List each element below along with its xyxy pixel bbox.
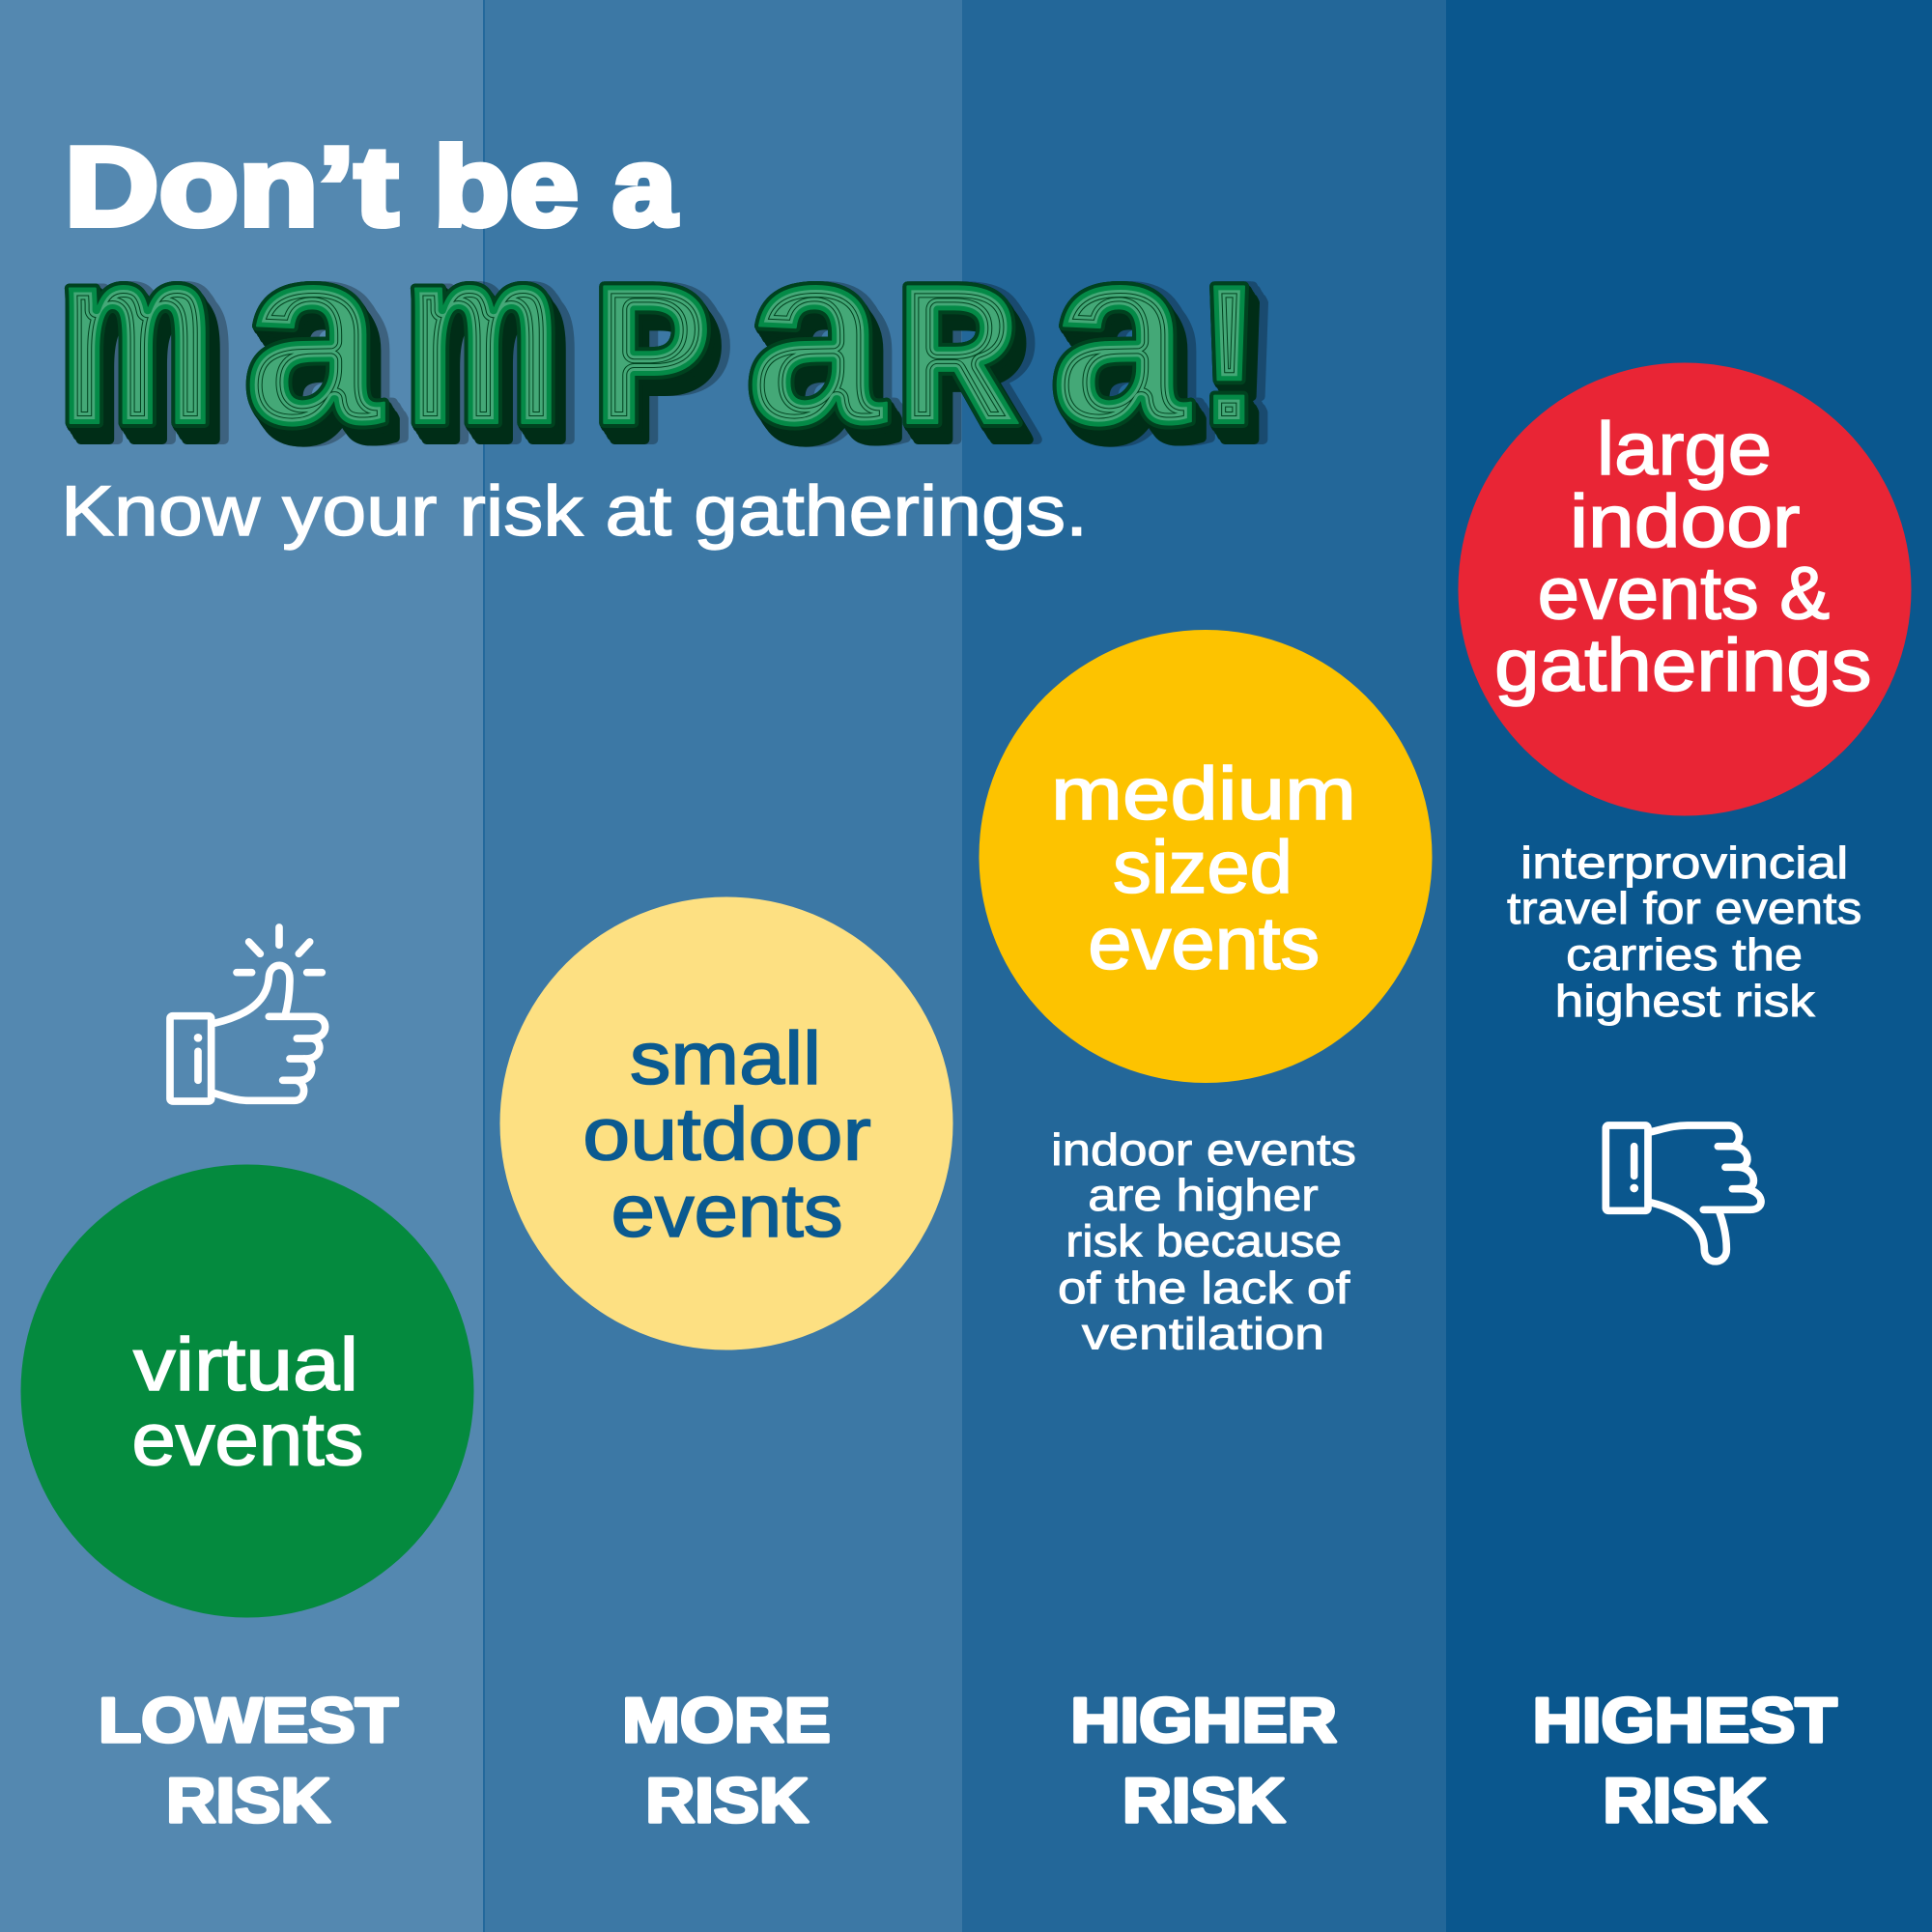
circle: large indoor events and gatherings: gatherings xyxy=(1494,624,1872,707)
text: indoor events note: of the lack of xyxy=(1058,1263,1350,1313)
panel: lowest risk column background xyxy=(0,0,483,1932)
label: lowest risk: LOWEST xyxy=(99,1685,398,1755)
text: indoor events note: indoor events xyxy=(1051,1124,1356,1175)
title: MAMPARA striped lettering: mamPaRa! xyxy=(61,212,1292,500)
title: Don't be a: be xyxy=(434,124,579,249)
text: indoor events note xyxy=(1051,1124,1356,1359)
text: indoor events note: risk because xyxy=(1065,1215,1342,1265)
circle: virtual events: events xyxy=(131,1399,363,1482)
circle: small outdoor events: outdoor xyxy=(582,1094,871,1177)
circle: medium sized events: medium xyxy=(1051,753,1356,836)
label: lowest risk: RISK xyxy=(166,1765,330,1835)
subtitle: Know your risk at gatherings. xyxy=(61,472,1088,551)
circle: medium sized events: events xyxy=(1088,902,1320,985)
text: interprovincial travel note: travel for events xyxy=(1507,883,1861,933)
text: interprovincial travel note xyxy=(1507,838,1861,1026)
label: highest risk xyxy=(1533,1685,1837,1835)
circle: small outdoor events: events xyxy=(611,1170,843,1253)
panel: more risk column background xyxy=(483,0,962,1932)
panel: highest risk column background xyxy=(1446,0,1932,1932)
title: Don't be a: Don’t xyxy=(65,124,398,249)
title: MAMPARA striped lettering: mamPaRa! xyxy=(61,212,1292,500)
circle: large indoor events and gatherings: events & xyxy=(1538,552,1830,635)
label: higher risk xyxy=(1070,1685,1337,1835)
text: indoor events note: ventilation xyxy=(1082,1309,1324,1359)
label: more risk: RISK xyxy=(645,1765,809,1835)
panel: higher risk column background xyxy=(962,0,1446,1932)
label: more risk: MORE xyxy=(622,1685,831,1755)
label: higher risk: HIGHER xyxy=(1070,1685,1337,1755)
title: MAMPARA striped lettering: mamPaRa! xyxy=(61,212,1292,500)
title: MAMPARA striped lettering: mamPaRa! xyxy=(61,212,1292,500)
text: interprovincial travel note: highest risk xyxy=(1555,976,1816,1026)
label: lowest risk xyxy=(99,1685,398,1835)
text: interprovincial travel note: carries the xyxy=(1566,929,1803,980)
title: MAMPARA striped lettering: mamPaRa! xyxy=(61,212,1292,500)
title: Don't be a xyxy=(65,124,678,249)
title: MAMPARA striped lettering: mamPaRa! xyxy=(61,212,1292,500)
icon: thumbs up xyxy=(170,927,326,1101)
text: interprovincial travel note: interprovincial xyxy=(1520,838,1848,888)
label: highest risk: HIGHEST xyxy=(1533,1685,1837,1755)
text: indoor events note: are higher xyxy=(1088,1170,1319,1220)
label: more risk xyxy=(622,1685,831,1835)
circle: virtual events: virtual xyxy=(133,1323,358,1406)
title: MAMPARA striped lettering xyxy=(64,281,1268,447)
title: MAMPARA striped lettering: mamPaRa! xyxy=(61,212,1292,500)
icon: thumbs down xyxy=(1605,1125,1761,1262)
circle: medium sized events: sized xyxy=(1113,826,1293,909)
label: higher risk: RISK xyxy=(1122,1765,1285,1835)
circle: large indoor events and gatherings xyxy=(1459,363,1911,815)
circle: medium sized events xyxy=(980,630,1432,1083)
label: highest risk: RISK xyxy=(1603,1765,1767,1835)
title: Don't be a: a xyxy=(612,124,678,249)
circle: large indoor events and gatherings: large xyxy=(1597,408,1772,491)
circle: small outdoor events xyxy=(500,896,952,1350)
title: MAMPARA striped lettering: mamPaRa! xyxy=(61,212,1292,500)
title: MAMPARA striped lettering: mamPaRa! xyxy=(61,212,1292,500)
circle: small outdoor events: small xyxy=(630,1017,821,1100)
circle: virtual events xyxy=(21,1165,473,1617)
circle: large indoor events and gatherings: indoor xyxy=(1570,480,1801,563)
